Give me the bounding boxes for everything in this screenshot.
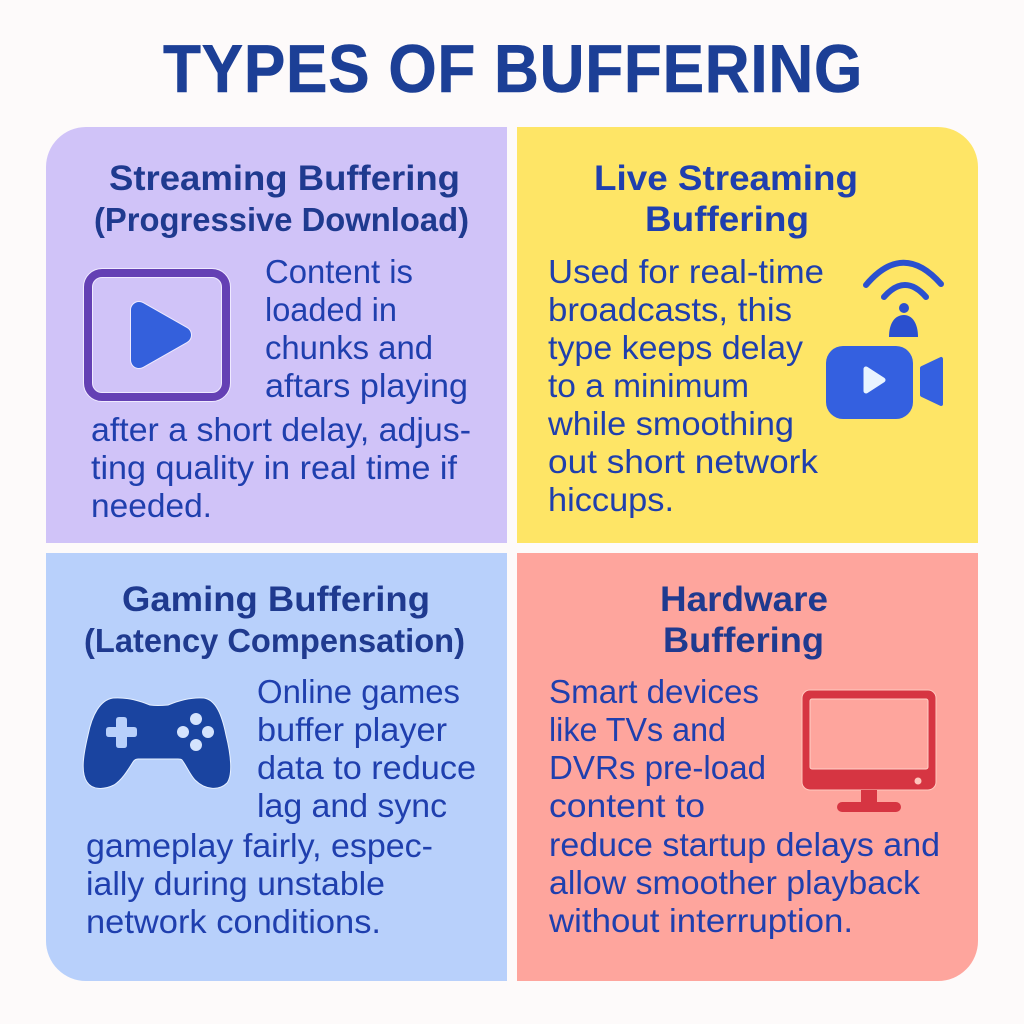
text: hardware description: reduce startup delays and [549, 827, 940, 864]
title: TYPES OF BUFFERING [163, 31, 863, 107]
text: gaming description: gameplay fairly, espec- [86, 828, 433, 865]
text: live streaming description: to a minimum [548, 368, 749, 405]
text: hardware description: DVRs pre-load [549, 750, 766, 787]
icon: video camera with wifi [826, 263, 941, 419]
text: hardware description: content to [549, 788, 705, 825]
text: hardware description: Smart devices [549, 674, 759, 711]
text: live streaming description: broadcasts, this [548, 292, 792, 329]
text: streaming description: after a short delay, adjus- [91, 412, 471, 449]
text: hardware description: without interruption. [548, 903, 853, 940]
text: gaming description [86, 674, 476, 941]
text: live streaming description: while smoothing [547, 406, 794, 443]
heading: streaming buffering [94, 159, 469, 238]
text: streaming description [91, 254, 471, 525]
text: streaming description: chunks and [265, 330, 433, 367]
heading: gaming buffering: (Latency Compensation) [84, 622, 465, 659]
text: streaming description: aftars playing [265, 368, 468, 405]
text: streaming description: loaded in [265, 292, 397, 329]
panel: gaming buffering [46, 553, 507, 981]
icon: tv monitor [802, 690, 936, 812]
text: gaming description: Online games [257, 674, 460, 711]
heading: live streaming [594, 159, 858, 239]
heading: hardware buffering: Buffering [663, 621, 824, 660]
icon: game controller [83, 698, 231, 788]
panel: streaming buffering [46, 127, 507, 543]
text: live streaming description: hiccups. [548, 482, 674, 519]
heading: live streaming: Buffering [645, 200, 809, 239]
text: gaming description: data to reduce [257, 750, 476, 787]
text: hardware description [548, 674, 940, 940]
text: gaming description: ially during unstable [86, 866, 385, 903]
icon: play button [88, 273, 226, 397]
text: streaming description: Content is [265, 254, 413, 291]
text: live streaming description: out short network [548, 444, 818, 481]
text: live streaming description [547, 254, 824, 519]
heading: gaming buffering [84, 580, 465, 659]
heading: streaming buffering: Streaming Buffering [109, 159, 460, 198]
text: hardware description: allow smoother playback [549, 865, 920, 902]
panel: live streaming buffering [517, 127, 978, 543]
text: streaming description: needed. [91, 488, 212, 525]
text: streaming description: ting quality in real time if [91, 450, 458, 487]
text: gaming description: lag and sync [257, 788, 447, 825]
heading: gaming buffering: Gaming Buffering [122, 580, 430, 619]
heading: hardware buffering [660, 580, 828, 660]
panel: hardware buffering [517, 553, 978, 981]
text: gaming description: buffer player [257, 712, 447, 749]
text: live streaming description: type keeps delay [548, 330, 803, 367]
text: live streaming description: Used for real-time [548, 254, 824, 291]
heading: streaming buffering: (Progressive Download) [94, 201, 469, 238]
heading: live streaming: Live Streaming [594, 159, 858, 198]
text: hardware description: like TVs and [549, 712, 726, 749]
heading: hardware buffering: Hardware [660, 580, 828, 619]
text: gaming description: network conditions. [86, 904, 381, 941]
